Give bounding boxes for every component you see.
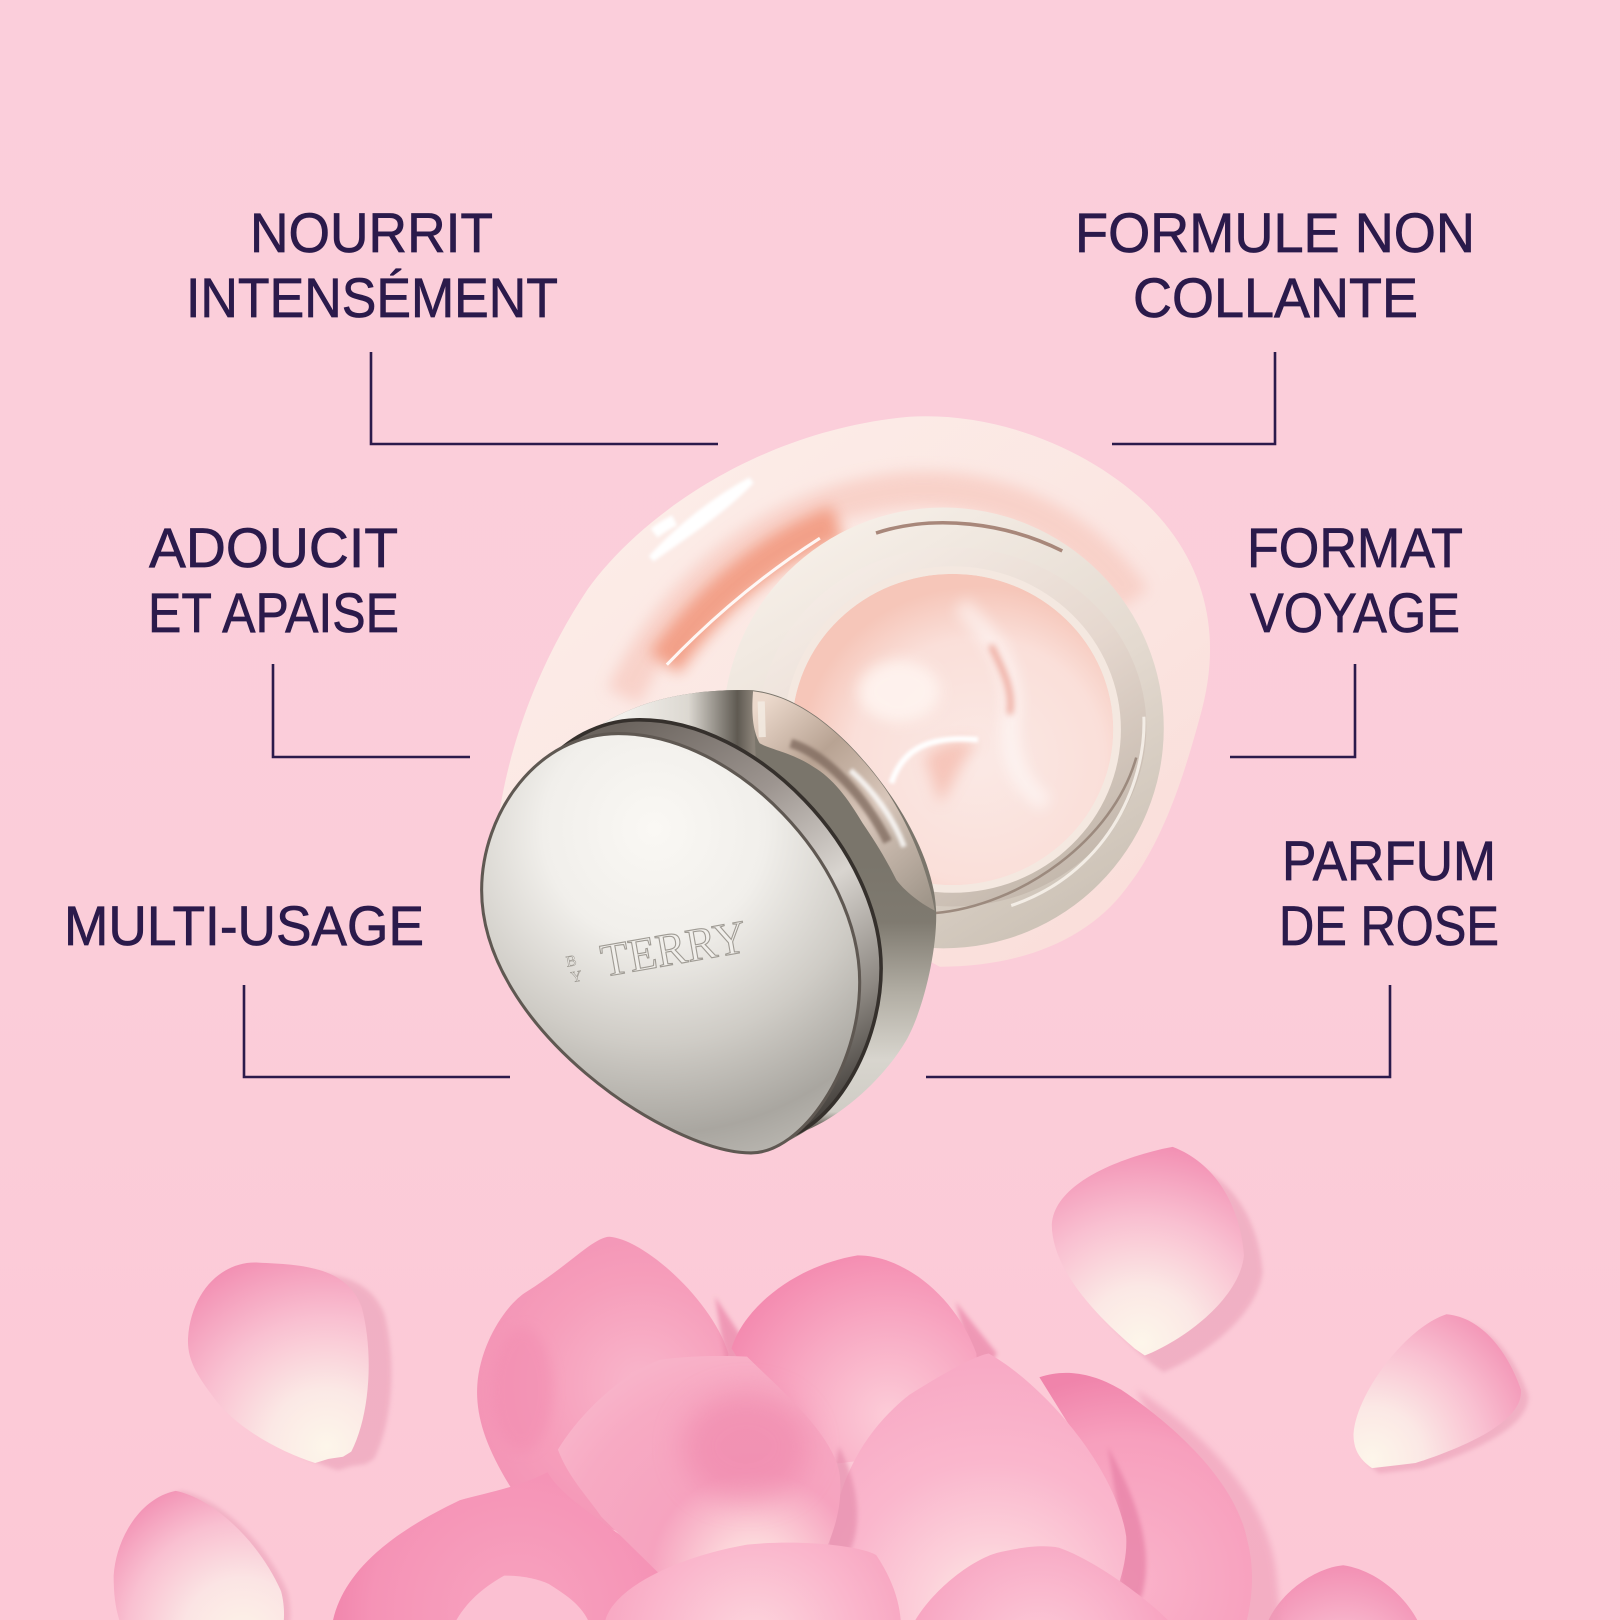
leader line: format xyxy=(1230,664,1355,757)
lid glass reflection xyxy=(752,691,935,911)
lid logo: TERRY xyxy=(597,911,751,988)
label: format voyage xyxy=(1247,516,1463,644)
label: adoucit et apaise xyxy=(148,516,399,644)
lid logo: B xyxy=(565,952,578,971)
petal: far right xyxy=(1353,1314,1528,1473)
label: formule non collante: FORMULE NON xyxy=(1075,201,1475,264)
label: formule non collante xyxy=(1075,201,1475,329)
lid rim xyxy=(503,720,881,1139)
lid xyxy=(482,690,936,1153)
lid logo: Y xyxy=(570,968,583,986)
infographic canvas xyxy=(68,212,1530,1620)
label: nourrit intensément: NOURRIT xyxy=(250,201,493,264)
lid side xyxy=(603,690,936,1153)
product: cream jar with lid xyxy=(482,416,1210,1153)
petal: upper right xyxy=(1052,1147,1263,1372)
petal: bottom right xyxy=(1266,1565,1421,1620)
label: nourrit intensément: INTENSÉMENT xyxy=(186,266,558,329)
petal: left xyxy=(188,1262,391,1470)
label: formule non collante: COLLANTE xyxy=(1133,266,1418,329)
label: parfum de rose xyxy=(1279,829,1499,957)
leader line: nourrit xyxy=(371,352,718,444)
leader line: multi-usage xyxy=(244,985,510,1077)
leader line: parfum xyxy=(926,985,1390,1077)
label: parfum de rose: DE ROSE xyxy=(1279,894,1499,957)
cream inside jar xyxy=(792,574,1113,885)
rose petals xyxy=(114,1147,1528,1620)
petal cluster xyxy=(332,1237,1281,1620)
petal: bottom left xyxy=(114,1491,290,1620)
label: format voyage: VOYAGE xyxy=(1250,581,1460,644)
jar body xyxy=(723,508,1164,948)
label: nourrit intensément xyxy=(186,201,558,329)
label: adoucit et apaise: ADOUCIT xyxy=(149,516,398,579)
leader line: adoucit xyxy=(273,664,470,757)
cream swirl xyxy=(498,416,1210,967)
lid face xyxy=(482,734,860,1153)
leader line: formule xyxy=(1112,352,1275,444)
label: parfum de rose: PARFUM xyxy=(1282,829,1496,892)
label: multi-usage: MULTI-USAGE xyxy=(64,894,424,957)
label: format voyage: FORMAT xyxy=(1247,516,1463,579)
label: adoucit et apaise: ET APAISE xyxy=(148,581,399,644)
